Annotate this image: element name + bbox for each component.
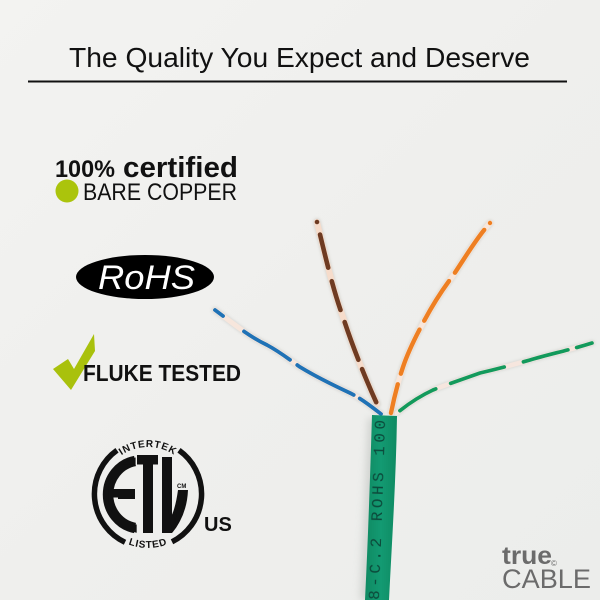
heading: 100% certified: 100%	[55, 156, 115, 183]
badge: ETL listed logo: T	[136, 432, 159, 557]
letter T top bar	[137, 455, 158, 464]
US label: US	[204, 514, 232, 536]
green twisted pair	[397, 343, 592, 413]
icon: check mark	[53, 334, 95, 390]
brown twisted pair	[317, 222, 377, 404]
letter V body	[162, 457, 188, 533]
outer ring	[94, 450, 202, 542]
RoHS label: RoHS	[98, 259, 195, 297]
cable illustration	[215, 222, 592, 600]
label: fluke tested: FLUKE TESTED	[83, 360, 241, 386]
badge: RoHS	[76, 255, 214, 299]
ring text: listed: LISTED	[128, 538, 166, 548]
orange twisted pair	[391, 223, 490, 413]
badge: 100% certified bare copper	[55, 152, 238, 206]
CM mark: CM	[177, 484, 186, 490]
badge: Fluke tested	[53, 334, 241, 390]
cable shadow	[360, 418, 384, 600]
logo registered mark: ©	[551, 559, 557, 568]
logo word: true: true	[502, 542, 552, 570]
title underline	[28, 80, 567, 82]
RoHS black ellipse	[76, 255, 214, 299]
icon: lime dot	[56, 180, 78, 202]
logo: trueCABLE	[502, 542, 591, 594]
letter E middle bar	[118, 489, 135, 499]
label: bare copper: BARE COPPER	[83, 179, 237, 206]
ring text: intertek: INTERTEK	[118, 440, 177, 455]
logo word: CABLE: CABLE	[502, 564, 591, 594]
green cable jacket	[365, 415, 397, 600]
letter E arc	[108, 461, 135, 528]
badge: ETL listed logo: E	[103, 432, 139, 557]
badge: ETL listed logo	[92, 440, 232, 548]
blue twisted pair	[215, 310, 381, 414]
heading: 100% certified: certified	[123, 152, 238, 184]
badge: ETL listed logo: V	[158, 432, 192, 557]
title: The Quality You Expect and Deserve	[69, 42, 530, 73]
letter T stem	[143, 458, 153, 533]
jacket print: 8-C.2 ROHS 100	[366, 420, 390, 600]
